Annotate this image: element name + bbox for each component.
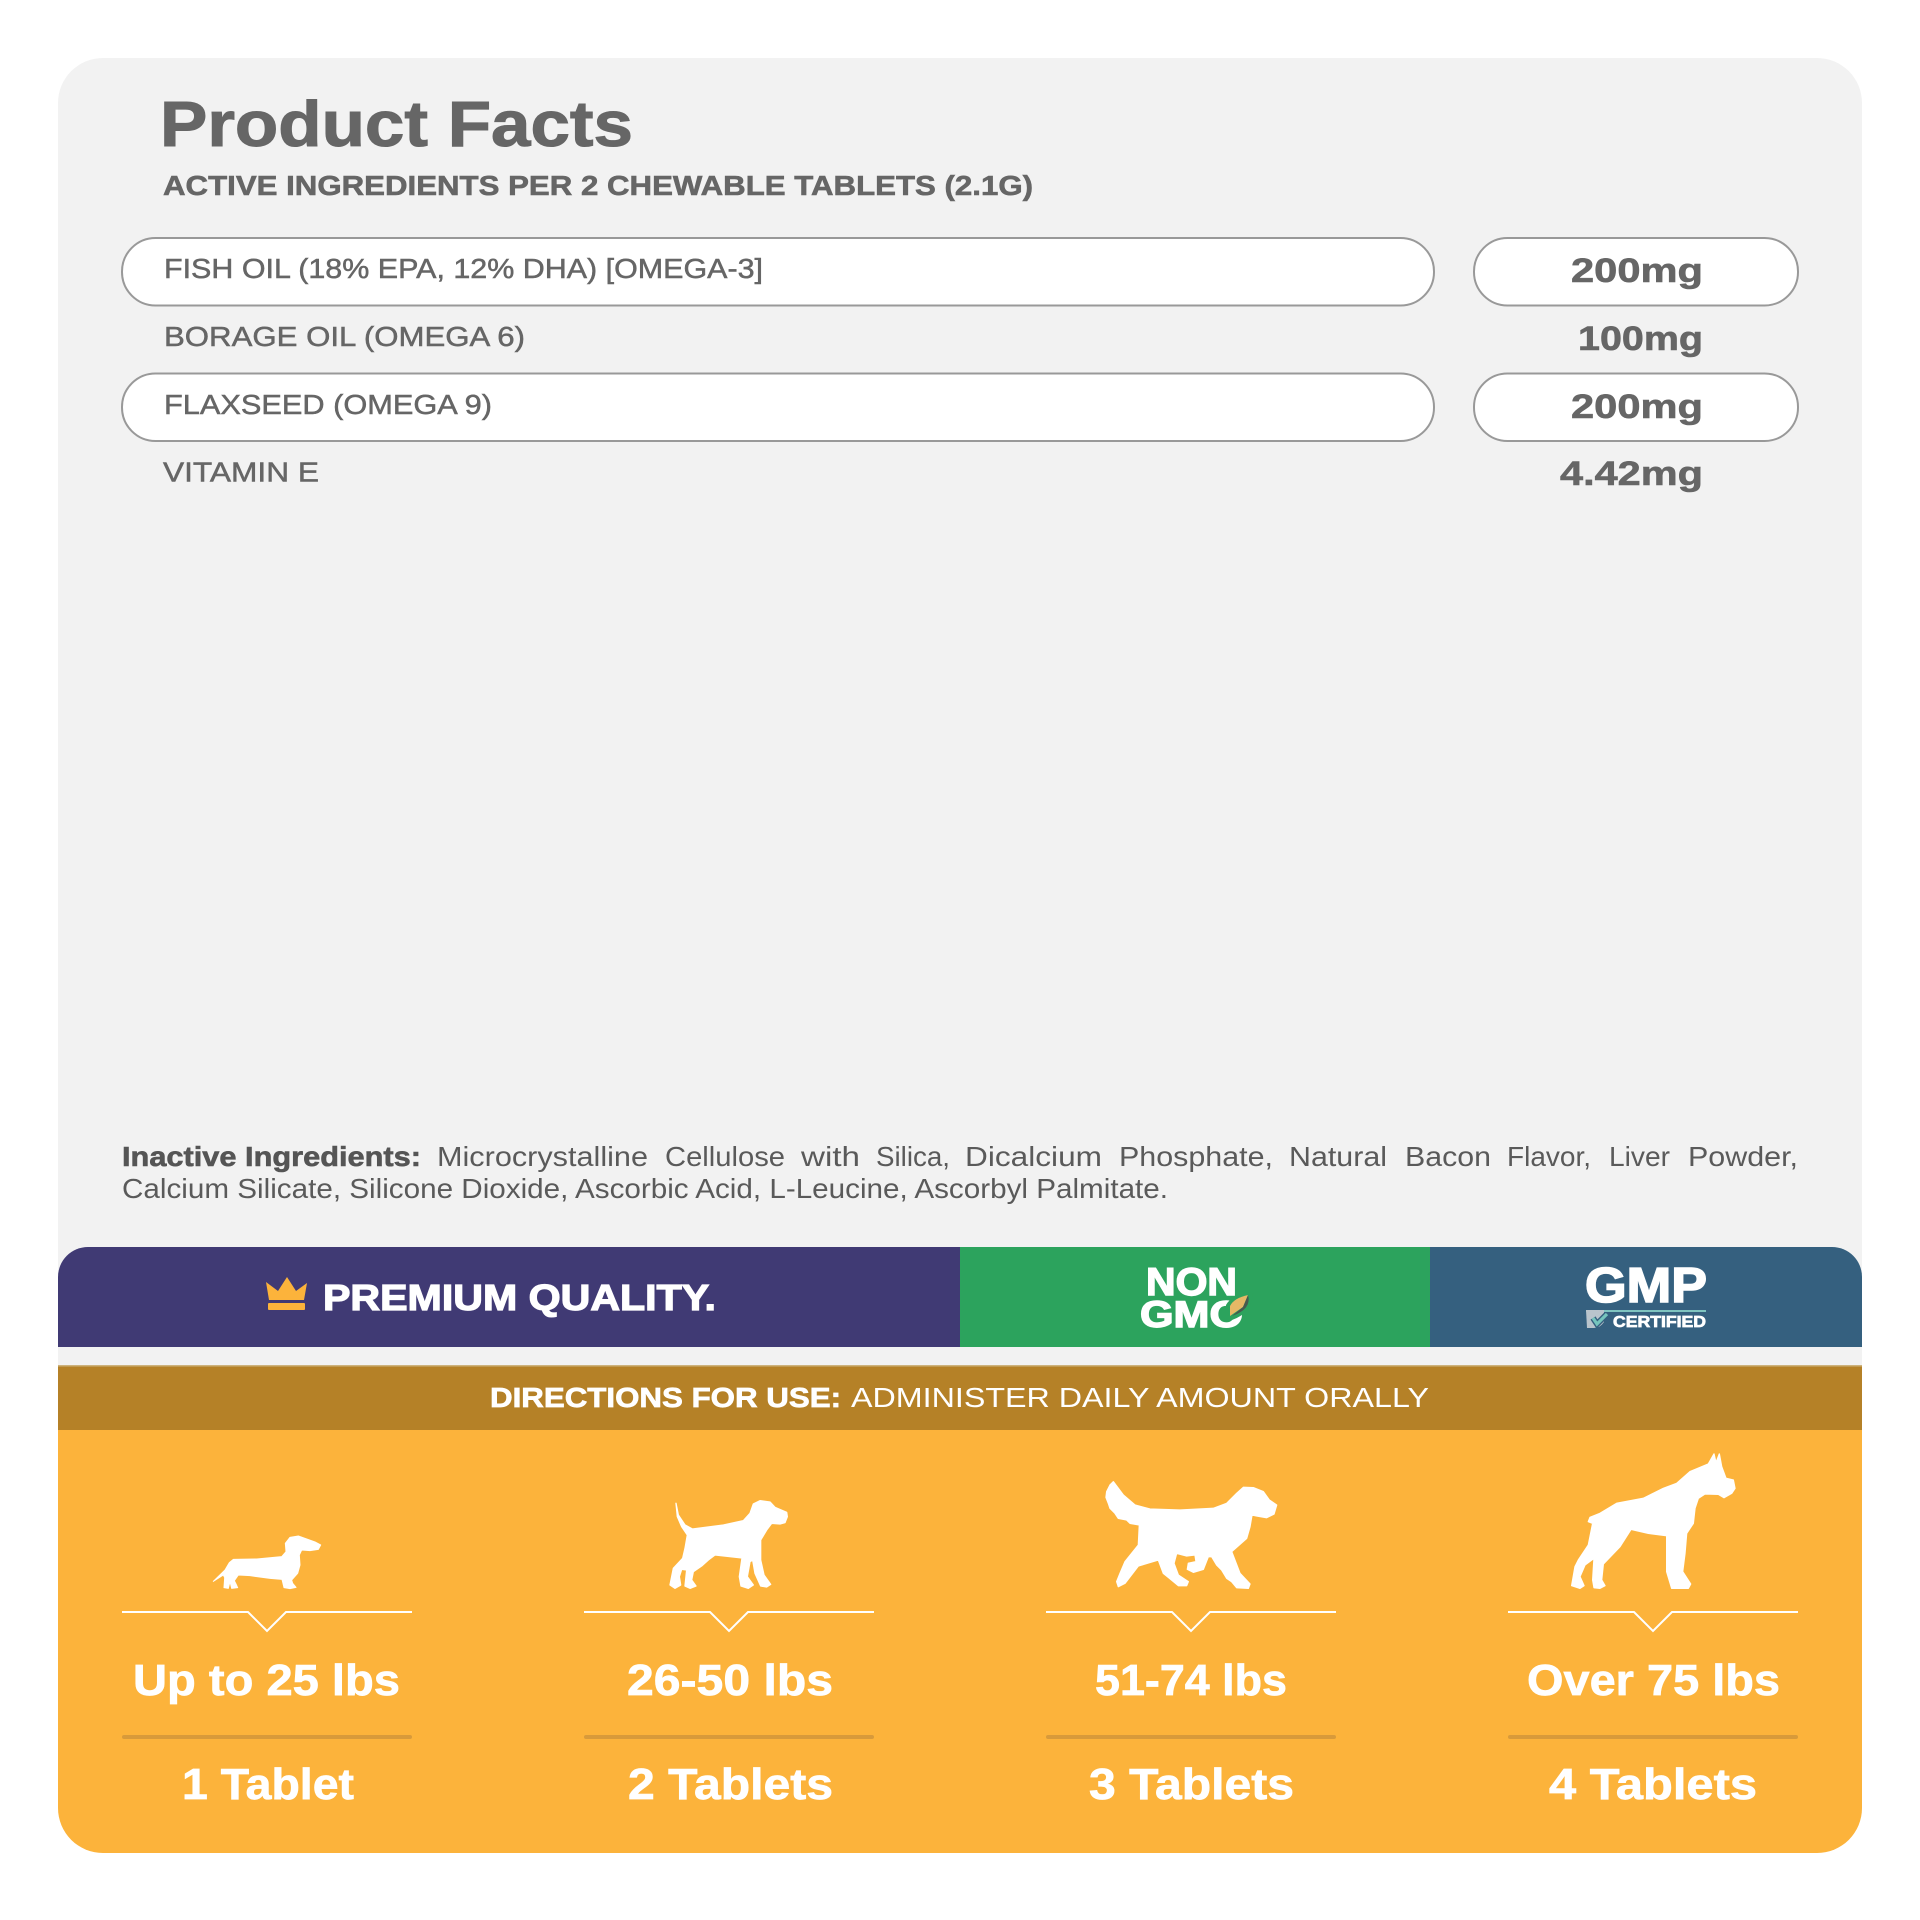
icon: beagle bbox=[670, 1501, 787, 1588]
badge: premium quality bbox=[58, 1247, 960, 1347]
icon: dachshund bbox=[213, 1536, 321, 1589]
icon: crown bbox=[266, 1277, 307, 1310]
row: borage oil bbox=[164, 320, 1703, 358]
inactive ingredients text: Dicalcium bbox=[965, 1141, 1102, 1172]
chevron divider bbox=[584, 1612, 874, 1631]
inactive ingredients text: Powder, bbox=[1688, 1141, 1798, 1172]
row: vitamin e: VITAMIN E bbox=[163, 456, 319, 488]
column: 26-50 lbs bbox=[584, 1501, 874, 1809]
panel: product facts background bbox=[58, 58, 1862, 1438]
inactive ingredients text bbox=[122, 1141, 1798, 1204]
icon: boxer bbox=[1572, 1454, 1735, 1588]
chevron divider bbox=[1508, 1612, 1798, 1631]
inactive ingredients text: Flavor, bbox=[1507, 1141, 1591, 1172]
chevron divider bbox=[122, 1612, 412, 1631]
badge: gmp certified: GMP bbox=[1585, 1259, 1707, 1313]
inactive ingredients text: Liver bbox=[1609, 1141, 1670, 1172]
row: fish oil: FISH OIL (18% EPA, 12% DHA) [OMEGA-3] bbox=[164, 253, 763, 284]
row: flaxseed bbox=[122, 374, 1798, 441]
panel: dosage bbox=[58, 1430, 1862, 1853]
inactive ingredients text: Inactive Ingredients: bbox=[122, 1141, 421, 1172]
column: 51-74 lbs bbox=[1046, 1482, 1336, 1809]
row: fish oil: 200mg bbox=[1571, 252, 1703, 290]
badge: non gmo: NON bbox=[1146, 1261, 1237, 1304]
inactive ingredients text: Phosphate, bbox=[1119, 1141, 1273, 1172]
tablet count: 3 Tablets bbox=[1089, 1760, 1294, 1809]
inactive ingredients text: Calcium Silicate, Silicone Dioxide, Ascorbic Acid, L-Leucine, Ascorbyl Palmitate. bbox=[122, 1173, 1168, 1204]
inactive ingredients text: Bacon bbox=[1405, 1141, 1491, 1172]
directions bar: DIRECTIONS FOR USE: bbox=[490, 1382, 841, 1413]
column: up to 25 lbs bbox=[122, 1536, 412, 1809]
weight label: 26-50 lbs bbox=[627, 1656, 833, 1705]
icon: golden retriever bbox=[1106, 1482, 1277, 1588]
weight label: Over 75 lbs bbox=[1527, 1656, 1780, 1705]
tablet count: 2 Tablets bbox=[628, 1760, 833, 1809]
icon: leaf bbox=[1226, 1292, 1252, 1320]
inactive ingredients text: Silica, bbox=[876, 1141, 950, 1172]
premium quality label: PREMIUM QUALITY. bbox=[323, 1277, 716, 1318]
tablet count: 4 Tablets bbox=[1549, 1760, 1757, 1809]
row: vitamin e bbox=[163, 455, 1703, 493]
badge: gmp certified: CERTIFIED bbox=[1613, 1314, 1706, 1331]
chevron divider bbox=[1046, 1612, 1336, 1631]
inactive ingredients text: Natural bbox=[1289, 1141, 1387, 1172]
inactive ingredients text: with bbox=[800, 1141, 860, 1172]
weight label: 51-74 lbs bbox=[1095, 1656, 1287, 1705]
row: borage oil: 100mg bbox=[1578, 320, 1703, 358]
inactive ingredients text: Microcrystalline bbox=[437, 1141, 648, 1172]
badge: non gmo bbox=[960, 1247, 1430, 1347]
row: fish oil bbox=[122, 238, 1798, 306]
directions bar: ADMINISTER DAILY AMOUNT ORALLY bbox=[851, 1382, 1429, 1413]
badge: gmp certified bbox=[1430, 1247, 1862, 1347]
tablet count: 1 Tablet bbox=[182, 1760, 354, 1809]
subtitle: ACTIVE INGREDIENTS PER 2 CHEWABLE TABLETS (2.1G) bbox=[163, 170, 1033, 201]
row: borage oil: BORAGE OIL (OMEGA 6) bbox=[164, 321, 525, 352]
inactive ingredients text: Cellulose bbox=[665, 1141, 785, 1172]
icon: shield check bbox=[1586, 1310, 1607, 1328]
title: Product Facts bbox=[160, 88, 633, 160]
weight label: Up to 25 lbs bbox=[133, 1656, 400, 1705]
column: over 75 lbs bbox=[1508, 1454, 1798, 1809]
row: flaxseed: FLAXSEED (OMEGA 9) bbox=[164, 389, 492, 420]
directions bar bbox=[58, 1365, 1862, 1430]
row: flaxseed: 200mg bbox=[1571, 388, 1703, 426]
row: vitamin e: 4.42mg bbox=[1560, 455, 1703, 493]
badge: non gmo: GMO bbox=[1140, 1294, 1243, 1335]
ingredient table bbox=[122, 238, 1798, 493]
